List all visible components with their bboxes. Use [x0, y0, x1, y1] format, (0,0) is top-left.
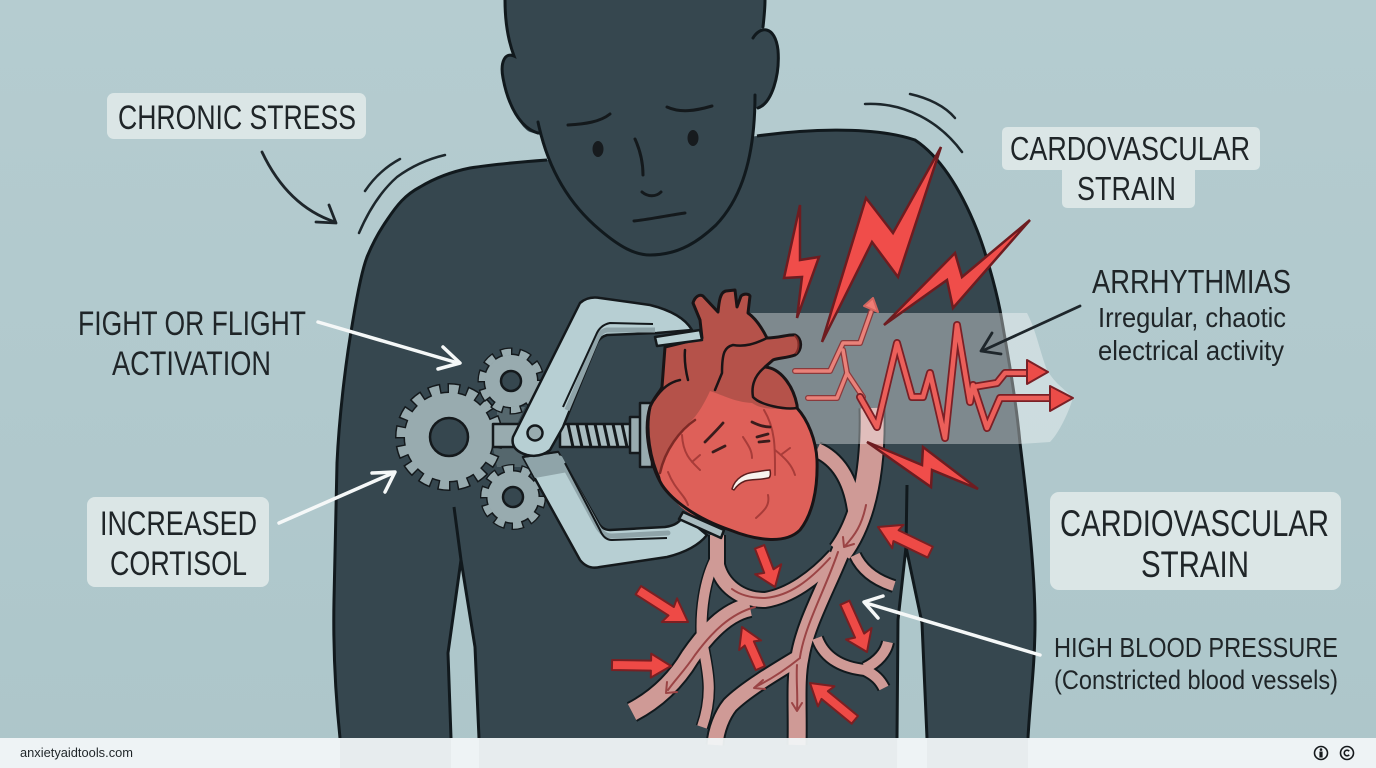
lower arm [523, 452, 707, 568]
lower small gear [484, 468, 542, 526]
heart face [705, 422, 770, 452]
upper jaw [655, 330, 702, 346]
lower jaw [679, 512, 724, 538]
label: chronic stress: CHRONIC STRESS [118, 99, 356, 137]
atria and great vessels [648, 290, 801, 480]
grimacing mouth [732, 470, 770, 490]
label: cardiovascular strain lower [1050, 492, 1341, 590]
label: cardiovascular strain top [1002, 127, 1260, 208]
arrhythmia ECG trace with arrows [795, 298, 1073, 438]
label: increased cortisol [87, 497, 269, 587]
constricted blood vessels [632, 408, 894, 745]
label: increased cortisol: INCREASED [100, 505, 257, 543]
upper small gear [482, 352, 540, 410]
label: chronic stress [107, 93, 366, 139]
arrow: arrhythmias to ECG [981, 306, 1080, 354]
label: fight or flight activation: ACTIVATION [112, 345, 271, 383]
face: worried expression [568, 106, 712, 221]
clamp jaws over the heart [655, 330, 724, 538]
footer bar [0, 738, 1376, 768]
label: arrhythmias [1092, 263, 1291, 366]
label: cardiovascular strain lower: STRAIN [1141, 544, 1249, 585]
label: arrhythmias: electrical activity [1098, 335, 1284, 366]
motion lines around the left shoulder [359, 155, 445, 233]
figure: stressed person silhouette [334, 0, 1035, 768]
label: fight or flight activation: FIGHT OR FLIGHT [78, 305, 306, 343]
lightning bolts [784, 147, 1030, 489]
label: arrhythmias: Irregular, chaotic [1098, 302, 1286, 333]
arrow: cortisol to gears [279, 472, 395, 523]
arrow: high blood pressure to vessels [864, 596, 1040, 655]
label: cardiovascular strain top: CARDOVASCULAR [1010, 130, 1250, 167]
anatomical heart with worried face [647, 290, 817, 539]
label: increased cortisol: CORTISOL [110, 545, 247, 583]
label: cardiovascular strain top: STRAIN [1077, 170, 1176, 207]
pressure arrows pressing on vessels [612, 515, 936, 730]
screw [493, 403, 652, 467]
shadow patches behind the gears [493, 407, 528, 467]
icon: copyright licence [1340, 746, 1354, 760]
arrow: fight or flight to gears [318, 322, 460, 369]
large gear [401, 389, 497, 485]
motion lines around the right shoulder [865, 94, 962, 152]
label: high blood pressure: (Constricted blood vessels) [1054, 665, 1338, 695]
label: arrhythmias: ARRHYTHMIAS [1092, 263, 1291, 300]
label: fight or flight activation [78, 305, 306, 383]
label: high blood pressure [1054, 632, 1338, 695]
translucent band behind the ECG trace [750, 313, 1073, 444]
surface veins [668, 410, 795, 518]
gears [401, 352, 542, 526]
ventricle [660, 391, 817, 539]
upper arm [513, 298, 692, 456]
clamp squeezing the heart [493, 298, 707, 568]
pivot bolt [528, 426, 542, 440]
icon: attribution licence [1314, 746, 1328, 760]
arrow: chronic stress to shoulder [262, 152, 336, 223]
footer site name: anxietyaidtools.com [20, 745, 133, 760]
